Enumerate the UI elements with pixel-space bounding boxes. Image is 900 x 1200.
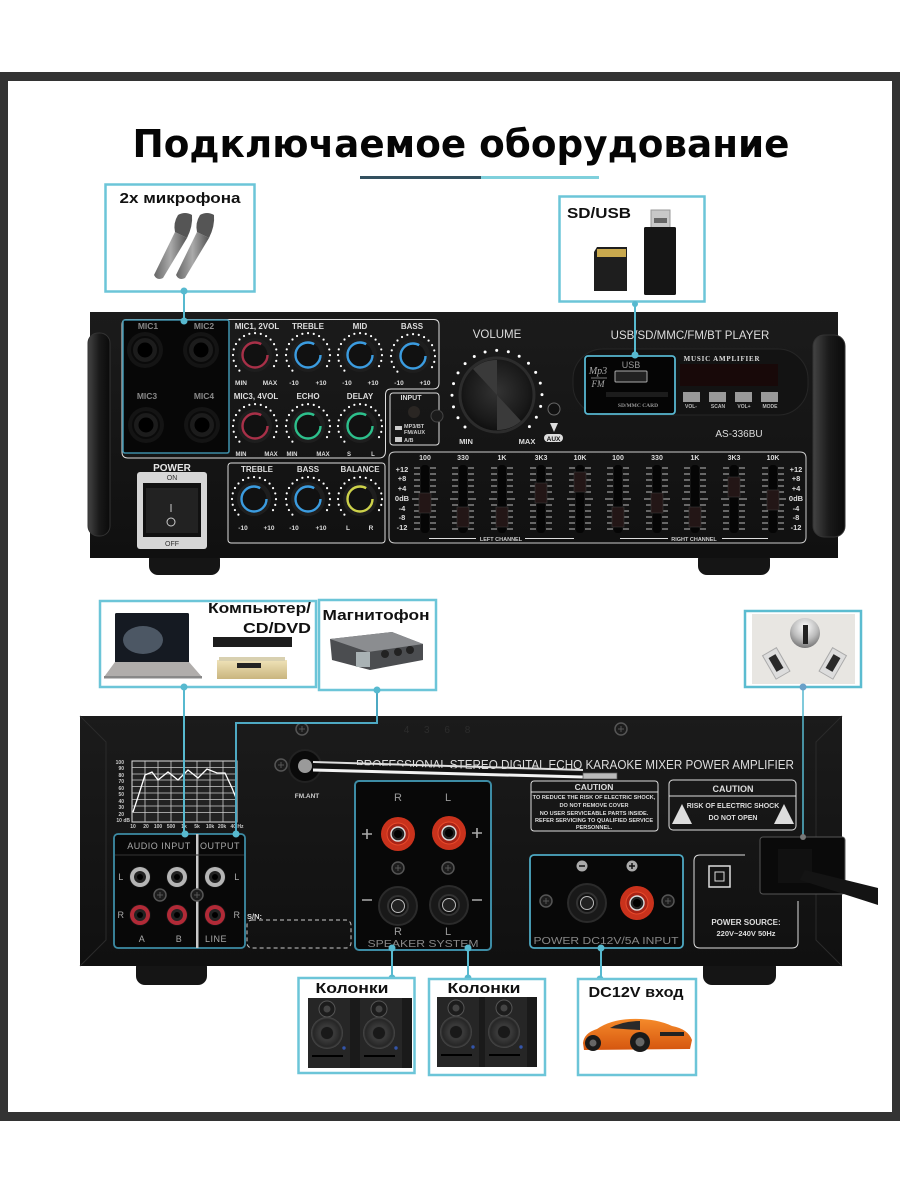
audio input/output block: OUTPUT bbox=[200, 841, 240, 851]
DC power input block bbox=[530, 855, 683, 948]
response graph: 10k bbox=[206, 824, 214, 830]
knob group: mic and tone: MAX bbox=[263, 380, 278, 387]
power switch: OFF bbox=[165, 541, 179, 548]
knob group: mic and tone: TREBLE bbox=[292, 322, 325, 331]
serial number box: S/N: bbox=[247, 912, 262, 921]
knob group: mic and tone: BASS bbox=[401, 322, 424, 331]
caution label 2: RISK OF ELECTRIC SHOCK bbox=[687, 803, 779, 810]
knob group: treble bass balance: +10 bbox=[315, 525, 327, 532]
equalizer sliders: RIGHT CHANNEL bbox=[671, 537, 717, 543]
icon: laptop bbox=[104, 613, 202, 678]
amplifier feet bbox=[149, 550, 770, 575]
callout: recorder: Магнитофон bbox=[322, 607, 430, 624]
equalizer sliders: +4 bbox=[398, 484, 407, 493]
callout: computer CD/DVD bbox=[100, 600, 316, 687]
icon: socket holes bbox=[763, 618, 846, 679]
audio input/output block bbox=[114, 834, 245, 948]
caution label 2 bbox=[669, 780, 796, 830]
callout: DC12V car: DC12V вход bbox=[588, 984, 684, 1001]
response graph: 10 dB bbox=[116, 818, 130, 824]
caution label 1: DO NOT REMOVE COVER bbox=[560, 803, 628, 809]
audio input/output block: R bbox=[118, 910, 124, 920]
connector: computer to audio input bbox=[180, 684, 188, 838]
equalizer sliders: -12 bbox=[791, 523, 801, 532]
callout: computer CD/DVD: Компьютер/ bbox=[208, 600, 312, 617]
knob group: mic and tone: -10 bbox=[394, 380, 404, 387]
AC power source label: POWER SOURCE: bbox=[711, 918, 781, 927]
aux jack: AUX bbox=[547, 436, 561, 443]
knob group: mic and tone: MAX bbox=[316, 452, 330, 458]
response graph: 40 bbox=[118, 799, 124, 805]
input selector bbox=[390, 393, 443, 445]
callout: speakers 2: Колонки bbox=[448, 980, 520, 997]
equalizer sliders: 0dB bbox=[789, 494, 804, 503]
rear panel amplifier bbox=[80, 716, 878, 985]
response graph: 500 bbox=[167, 824, 175, 830]
mic input block bbox=[123, 320, 229, 453]
player module: SCAN bbox=[711, 404, 725, 410]
USB slot highlight: SD/MMC CARD bbox=[618, 403, 658, 409]
equalizer sliders: 330 bbox=[651, 455, 663, 462]
equalizer sliders: 10K bbox=[767, 455, 779, 462]
icon: microphone 1 bbox=[154, 213, 192, 279]
equalizer sliders: 1K bbox=[691, 455, 699, 462]
response graph: 70 bbox=[118, 779, 124, 785]
volume knob: MAX bbox=[519, 437, 535, 446]
connector: socket to plug bbox=[800, 684, 806, 840]
response graph: 20 bbox=[143, 824, 149, 830]
knob group: mic and tone: MIN bbox=[236, 452, 246, 458]
panel outline: top controls bbox=[122, 320, 439, 458]
mic input block: MIC2 bbox=[194, 321, 214, 331]
knob group: mic and tone: +10 bbox=[315, 380, 327, 387]
response graph: 50 bbox=[118, 792, 124, 798]
rear panel amplifier: 4 3 6 8 bbox=[404, 725, 476, 736]
knob group: treble bass balance: TREBLE bbox=[241, 465, 274, 474]
icon: microphone 2 bbox=[176, 213, 214, 279]
chassis bbox=[90, 312, 838, 558]
power plug and cable bbox=[760, 837, 878, 905]
mic input block: MIC3 bbox=[137, 391, 157, 401]
model heading: PROFESSIONAL STEREO DIGITAL ECHO KARAOKE MIXER POWER AMPLIFIER bbox=[356, 757, 794, 772]
volume knob bbox=[452, 329, 542, 446]
speaker terminals block: L bbox=[445, 926, 451, 938]
audio input/output block: B bbox=[176, 934, 182, 944]
callout: recorder bbox=[319, 600, 436, 690]
input selector: MP3/BT bbox=[404, 424, 425, 430]
power switch bbox=[137, 463, 207, 549]
equalizer sliders: -12 bbox=[397, 523, 407, 532]
response graph: 60 bbox=[118, 786, 124, 792]
serial number box bbox=[247, 912, 351, 948]
equalizer sliders: +12 bbox=[790, 465, 802, 474]
response graph: 40 Hz bbox=[230, 824, 244, 830]
knob group: treble bass balance: L bbox=[346, 525, 350, 532]
knob group: mic and tone: -10 bbox=[342, 380, 352, 387]
knob group: mic and tone: MID bbox=[353, 322, 368, 331]
callout: socket bbox=[745, 611, 861, 687]
speaker terminals block bbox=[355, 781, 491, 950]
front panel amplifier bbox=[88, 312, 845, 575]
player module: VOL+ bbox=[737, 404, 751, 410]
icon: DVD player bbox=[213, 637, 292, 647]
response graph: 30 bbox=[118, 805, 124, 811]
callout: speakers 1 bbox=[298, 978, 414, 1073]
volume knob: MIN bbox=[459, 437, 473, 446]
response graph bbox=[116, 760, 244, 830]
icon: speaker pair 2 bbox=[437, 997, 537, 1067]
callout: SD/USB: SD/USB bbox=[567, 205, 631, 222]
equalizer sliders: +8 bbox=[792, 474, 800, 483]
knob group: mic and tone bbox=[233, 322, 435, 458]
response graph: 20k bbox=[218, 824, 226, 830]
equalizer sliders: -8 bbox=[793, 513, 799, 522]
screws bbox=[275, 723, 627, 771]
response graph: 90 bbox=[118, 766, 124, 772]
knob group: mic and tone: DELAY bbox=[347, 392, 374, 401]
equalizer sliders: 0dB bbox=[395, 494, 410, 503]
title: Подключаемое оборудование bbox=[132, 122, 790, 166]
mic input block: MIC1 bbox=[138, 321, 158, 331]
connector: recorder to output bbox=[232, 686, 380, 838]
DC power input block: POWER DC12V/5A INPUT bbox=[534, 936, 678, 947]
equalizer sliders: -8 bbox=[399, 513, 405, 522]
icon: VCD player bbox=[217, 657, 287, 679]
connector: SD/USB to slot bbox=[632, 301, 638, 358]
equalizer sliders: 330 bbox=[457, 455, 469, 462]
speaker terminals block: R bbox=[394, 926, 402, 938]
player module bbox=[573, 330, 808, 440]
AC power source label: 220V~240V 50Hz bbox=[716, 929, 776, 938]
knob group: mic and tone: MIC1, 2VOL bbox=[235, 322, 279, 331]
equalizer sliders: 100 bbox=[612, 455, 624, 462]
connector: speakers 2 bbox=[464, 944, 472, 982]
input selector: FM/AUX bbox=[404, 430, 425, 436]
volume knob: VOLUME bbox=[473, 329, 522, 341]
knob group: treble bass balance bbox=[228, 463, 385, 543]
speaker terminals block: SPEAKER SYSTEM bbox=[368, 939, 478, 950]
caution label 1 bbox=[531, 781, 658, 831]
knob group: mic and tone: L bbox=[371, 452, 375, 458]
equalizer sliders: LEFT CHANNEL bbox=[480, 537, 523, 543]
caution label 2: CAUTION bbox=[712, 784, 754, 794]
rear feet bbox=[136, 958, 776, 985]
callout: SD/USB bbox=[560, 196, 704, 302]
caution label 2: DO NOT OPEN bbox=[708, 815, 758, 822]
audio input/output block: L bbox=[234, 872, 240, 882]
response graph: 1k bbox=[181, 824, 187, 830]
knob group: mic and tone: MIN bbox=[286, 452, 298, 458]
USB slot highlight: FM bbox=[590, 379, 605, 389]
caution label 1: PERSONNEL. bbox=[576, 825, 613, 831]
callout: microphones bbox=[106, 184, 254, 292]
player module: MODE bbox=[762, 404, 778, 410]
player module: VOL- bbox=[685, 404, 697, 410]
caution label 1: NO USER SERVICEABLE PARTS INSIDE. bbox=[540, 811, 649, 817]
callout: computer CD/DVD: CD/DVD bbox=[243, 620, 311, 637]
knob group: mic and tone: +10 bbox=[367, 380, 379, 387]
icon: speaker pair 1 bbox=[308, 998, 412, 1068]
speaker terminals block: R bbox=[394, 792, 402, 804]
knob group: treble bass balance: BALANCE bbox=[340, 465, 380, 474]
response graph: 100 bbox=[116, 760, 124, 766]
caution label 1: REFER SERVICING TO QUALIFIED SERVICE bbox=[535, 818, 653, 824]
caution label 1: CAUTION bbox=[575, 782, 613, 792]
callout: microphones: 2x микрофона bbox=[120, 190, 241, 207]
equalizer sliders: 10K bbox=[574, 455, 586, 462]
equalizer sliders: 3K3 bbox=[728, 455, 741, 462]
audio input/output block: LINE bbox=[205, 934, 227, 944]
player module: MUSIC AMPLIFIER bbox=[684, 355, 761, 363]
icon: USB stick bbox=[644, 210, 676, 295]
knob group: mic and tone: MAX bbox=[264, 452, 278, 458]
response graph: 10 bbox=[130, 824, 136, 830]
response graph: 80 bbox=[118, 773, 124, 779]
rear chassis bbox=[80, 716, 842, 966]
equalizer sliders: 3K3 bbox=[535, 455, 548, 462]
knob group: mic and tone: MIC3, 4VOL bbox=[234, 392, 278, 401]
audio input/output block: A bbox=[139, 934, 145, 944]
equalizer sliders: +4 bbox=[792, 484, 801, 493]
response graph: 100 bbox=[154, 824, 162, 830]
response graph: 20 bbox=[118, 812, 124, 818]
AC power source label bbox=[694, 855, 798, 948]
equalizer sliders: +8 bbox=[398, 474, 406, 483]
icon: orange car bbox=[583, 1019, 692, 1052]
audio input/output block: L bbox=[118, 872, 124, 882]
icon: warning triangles bbox=[672, 804, 794, 824]
equalizer sliders: 100 bbox=[419, 455, 431, 462]
player module: AS-336BU bbox=[715, 429, 763, 440]
callout: speakers 1: Колонки bbox=[316, 980, 388, 997]
icon: SD card bbox=[594, 247, 627, 291]
USB slot highlight: Mp3 bbox=[588, 366, 607, 377]
connector: microphones to mic inputs bbox=[180, 288, 188, 324]
knob group: mic and tone: S bbox=[347, 452, 351, 458]
aux jack bbox=[544, 403, 563, 443]
left handle bbox=[88, 333, 110, 536]
right handle bbox=[813, 335, 845, 537]
connector: speakers 1 bbox=[388, 944, 396, 982]
audio input/output block: R bbox=[234, 910, 240, 920]
input selector: INPUT bbox=[400, 395, 422, 402]
knob group: treble bass balance: -10 bbox=[238, 525, 248, 532]
connector: DC input bbox=[596, 944, 604, 982]
audio input/output block: AUDIO INPUT bbox=[127, 841, 191, 851]
knob group: mic and tone: MIN bbox=[235, 380, 247, 387]
response graph: 5k bbox=[194, 824, 200, 830]
input selector: A/B bbox=[404, 438, 414, 444]
player module: USB/SD/MMC/FM/BT PLAYER bbox=[611, 330, 769, 342]
equalizer sliders: -4 bbox=[399, 504, 406, 513]
equalizer sliders: 1K bbox=[498, 455, 506, 462]
USB slot highlight bbox=[585, 356, 675, 414]
speaker terminals block: L bbox=[445, 792, 451, 804]
knob group: mic and tone: ECHO bbox=[296, 392, 320, 401]
knob group: mic and tone: -10 bbox=[289, 380, 299, 387]
FM antenna label and nut: FM.ANT bbox=[295, 793, 319, 800]
knob group: treble bass balance: R bbox=[369, 525, 374, 532]
USB slot highlight: USB bbox=[622, 360, 640, 370]
callout: DC12V car bbox=[578, 979, 696, 1075]
mic input block: MIC4 bbox=[194, 391, 214, 401]
power switch: ON bbox=[167, 475, 177, 482]
FM antenna label and nut bbox=[289, 750, 321, 800]
equalizer sliders bbox=[389, 452, 806, 543]
equalizer sliders: +12 bbox=[396, 465, 408, 474]
icon: recorder bbox=[330, 632, 423, 670]
power switch: POWER bbox=[153, 463, 192, 474]
knob group: treble bass balance: +10 bbox=[263, 525, 275, 532]
knob group: treble bass balance: BASS bbox=[297, 465, 320, 474]
callout: speakers 2 bbox=[429, 979, 545, 1075]
antenna bbox=[313, 762, 617, 779]
knob group: mic and tone: +10 bbox=[419, 380, 431, 387]
caution label 1: TO REDUCE THE RISK OF ELECTRIC SHOCK, bbox=[533, 795, 656, 801]
knob group: treble bass balance: -10 bbox=[289, 525, 299, 532]
equalizer sliders: -4 bbox=[793, 504, 800, 513]
